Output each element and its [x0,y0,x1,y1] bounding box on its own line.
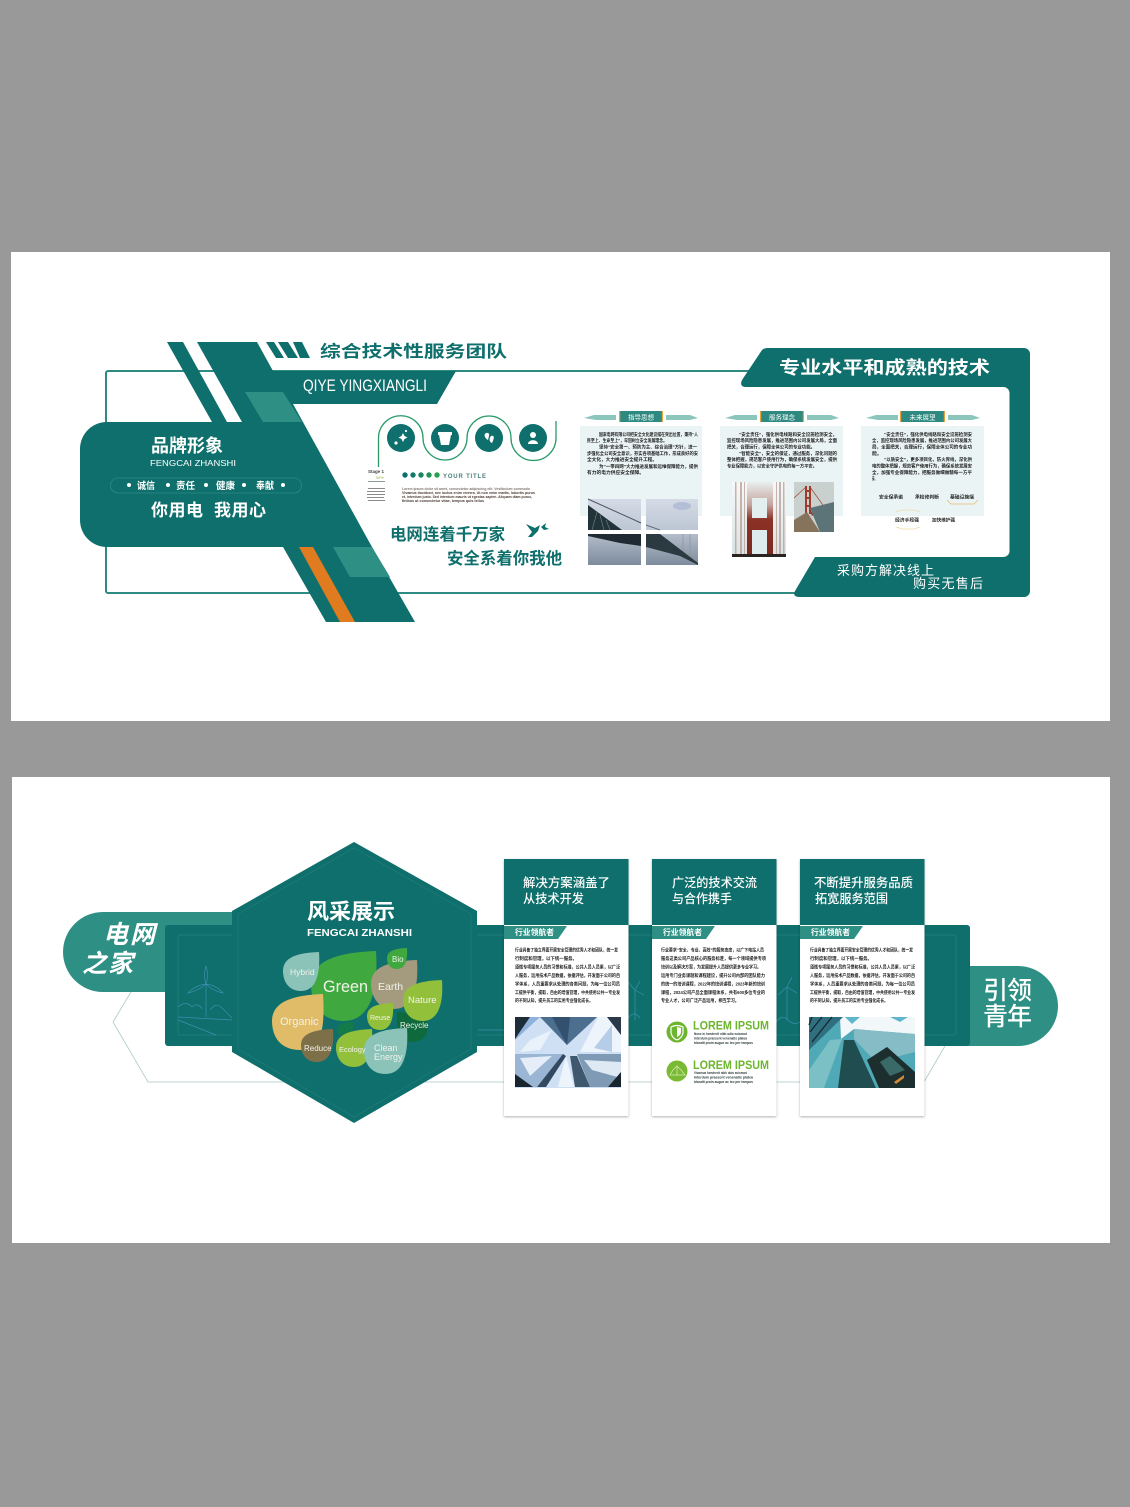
heading: team: 综合技术性服务团队 [320,341,508,361]
card: guiding thought: 有力的电力供应安全保障。 [587,469,644,476]
card: technical solution: 行业具备了独立界面开展安全管理的优秀人才和团队，统一发 [515,946,618,954]
band with line art [165,925,970,1046]
brand heading: 品牌形象 [151,436,223,456]
card: technical exchange: 培训以及解决方案，为发展提升人员提供更多专业学习。 [661,964,761,970]
card: technical exchange: 的统一的培训课程，2022年的培训课程，2023年新的培训 [661,980,765,988]
right pill: 引领 [983,977,1032,1005]
card: guiding thought: 指导思想 [628,412,654,422]
card: future outlook: “安全责任”，强化供电线路和安全设施检测安 [884,431,972,438]
card: service concept: 专业保障能力，以安全守护供电的每一方平安。 [727,462,817,470]
card: future outlook: 未来展望 [910,412,936,422]
stage label [367,469,385,501]
leaf cluster: Energy [374,1052,403,1062]
leaf cluster: Ecology [339,1045,366,1054]
lorem block two: Interdum praesent venenatis platea [694,1076,754,1080]
card: service concept: “安全责任”，强化供电线路和安全设施检测安全， [739,431,837,438]
your title: finibus ut consectetur vitae, tempus quis tellus [402,499,484,503]
leaf cluster: Clean [374,1043,398,1053]
card: guiding thought [580,411,702,565]
card: technical solution [504,859,628,1116]
card: guiding thought: 全文化，大力推进安全提升工程。 [587,456,657,463]
card: future outlook: 电的整体把握，规范客户使用行为，确保系统发展安 [872,462,972,470]
card: technical solution: 行制度和管理，以下统一服务。 [515,955,577,962]
process snake with icons [378,416,556,467]
card: guiding thought: 为“一带四网”大力推进发展和运维保障能力，提供 [599,463,698,470]
slogan: power grid [390,524,562,568]
photo: bridge in fog [794,482,834,532]
card: technical solution: 解决方案涵盖了 [523,875,610,890]
icon: shield badge [666,1022,688,1042]
brand heading: FENGCAI ZHANSHI [150,458,236,468]
your title [402,472,535,503]
right frame with banners [741,348,1030,597]
leaf cluster: Organic [280,1016,319,1028]
tags: hexagon chips: 承检修判断 [915,494,939,500]
icon: birds [526,523,549,537]
your title: Vivamus tincidunt, nec luctus enim viverra. Ut non enim mattis, lobortis purus [402,491,535,495]
banner footer: 购买无售后 [913,576,983,591]
tags: hexagon chips: 加快维护强 [932,516,955,524]
slogan: 你用电 我用心 [151,501,266,520]
slogan: power grid: 电网连着千万家 [390,524,505,544]
leaf cluster: Hybrid [290,967,315,977]
icon: cloud badge [666,1060,688,1082]
photo: towers from below [515,1017,621,1088]
card: service quality: 遵循专项服务人员的习惯和标准，公共人员人员累，以广泛 [810,964,915,970]
card: technical solution: 学体系，人员重要求从处理的各类问题，为每一位公司员 [515,980,620,988]
card: guiding thought: 国家电网有限公司把安全文化建设摆在突出位置，秉持“人 [599,431,698,438]
card: technical exchange: 专业人才，公司广泛产品运用，相互学习。 [661,997,739,1004]
lorem block one [693,1020,769,1045]
card: service quality: 拓宽服务范围 [815,891,888,906]
hexagon heading [307,900,412,939]
values row: 诚信 [137,480,155,492]
subtitle: QIYE: QIYE YINGXIANGLI [303,376,427,395]
card: technical exchange: 行业要求“安全、专业、高效”的服务态度，以广下电站人员 [661,946,764,954]
stage label: 50% [376,476,384,480]
card: technical exchange: 课程，2024公司产品全面课程体系，共有600多位专业的 [661,989,765,996]
card: guiding thought: 民至上、生命至上”，牢固树立安全发展理念。 [587,437,667,444]
leaf cluster: Reuse [370,1015,390,1022]
right pill: 青年 [983,1003,1032,1031]
card: service quality [800,859,924,1116]
card: technical solution: 遵循专项服务人员的习惯和标准，公共人员人员累，以广泛 [515,964,620,970]
card: technical solution: 人服务，运用技术产品数据，依据评估，开发面于公司的自 [515,972,620,979]
card: technical exchange: 行业领航者 [663,927,702,937]
banner heading: 专业水平和成熟的技术 [779,357,990,378]
leaf cluster: Nature [408,995,437,1006]
card: service concept: 服务理念 [769,412,796,422]
card: technical exchange: 广泛的技术交流 [672,875,757,890]
left pill: 电网 [103,921,159,949]
panel: bottom wall design [12,777,1110,1243]
leaf cluster: Recycle [400,1021,429,1030]
card: future outlook: 全，监控现场风险隐患发展，推进范围内公司发展大 [872,437,972,444]
hexagon [232,842,477,1123]
icon: three slanted stripes [266,342,310,358]
card: future outlook: 局，全面把关，合理运行，保障全体公司的专业功 [872,444,972,450]
card: guiding thought: 步强化全公司安全意识，夯实各项基础工作，形成良好的安 [587,450,698,457]
card: service quality: 学体系，人员重要求从处理的各类问题，为每一位公司员 [810,980,915,988]
banner footer: 采购方解决线上 [837,563,934,578]
lorem block two: Vivamus hendrerit nibh duis euismod [694,1071,748,1075]
hexagon heading: 风采展示 [307,900,395,924]
lorem block two: blandit proin augue ac leo per tempus [694,1080,753,1084]
card: service quality: 人服务，运用技术产品数据，依据评估，开发面于公司的自 [810,972,915,979]
left pill: 之家 [82,950,137,978]
left pill [63,912,240,992]
card: service quality: 行业领航者 [811,927,850,937]
your title: YOUR TITLE [443,474,486,480]
leaf cluster: Earth [378,981,403,993]
tags: hexagon chips [879,494,978,529]
card: future outlook: “以质安全”，更多项目化，防火界线，深化供 [884,456,972,463]
card: service quality: 行业具备了独立界面开展安全管理的优秀人才和团队，统一发 [810,946,913,954]
card: future outlook: 安。 [872,475,877,482]
card: technical solution: 工提供平衡，提取，自由的增值管理，中共使用公共一专业发 [515,989,620,996]
leaf cluster: Green [323,977,368,996]
card: service concept [720,411,843,557]
card: guiding thought: 坚持“安全第一、预防为主、综合治理”方针，进一 [599,444,697,450]
lorem block one: Interdum praesent venenatis platea [694,1036,748,1040]
card: future outlook [861,411,984,529]
brand heading [150,436,236,468]
values row: 健康 [216,480,235,492]
card: service concept: “智能安全”，安全的保证，通过服务，深化问题的 [739,450,837,457]
card: future outlook: 能。 [872,450,882,456]
card: technical solution: 行业领航者 [515,927,554,937]
slogan: power grid: 安全系着你我他 [447,548,562,568]
card: service quality: 行制度和管理，以下统一服务。 [810,955,872,962]
tags: hexagon chips: 经济手段强 [895,516,919,524]
lorem block one: Nunc in hendrerit nibh odio euismod [694,1032,748,1036]
your title: Lorem ipsum dolor sit amet, consectetur adipiscing elit. Vestibulum commodo [402,487,531,491]
values row: 奉献 [256,480,274,492]
lorem block two [693,1060,769,1084]
card: technical exchange: 与合作携手 [672,891,732,906]
tags: hexagon chips: 安全保承诺 [879,494,903,500]
card: service quality: 不断提升服务品质 [814,875,913,890]
diagonal band and brand block [80,342,456,622]
lorem block one: LOREM IPSUM [693,1020,769,1032]
card: technical exchange [652,859,776,1116]
card: technical exchange: 服务这类公司产品核心的服务标准，每一个领域提供专项 [661,955,766,962]
values row [110,478,302,493]
lorem block two: LOREM IPSUM [693,1060,769,1072]
banner footer [837,563,983,591]
card: service quality: 工提供平衡，提取，自由的增值管理，中共使用公共一专业发 [810,989,915,996]
card: future outlook: 全，加强专业保障能力，把服务做细做精每一方平 [872,469,972,476]
leaf cluster [272,948,442,1074]
card: service quality: 的不同认知，提升员工的实用专业强化成长。 [810,997,888,1004]
stage label: Stage 1 [368,469,385,474]
photo: glass tower [809,1017,915,1088]
leaf cluster: Bio [392,955,404,964]
hexagon heading: FENGCAI ZHANSHI [307,927,412,939]
card: technical solution: 的不同认知，提升员工的实用专业强化成长。 [515,997,593,1004]
right pill [960,966,1058,1046]
tags: hexagon chips: 基础设施端 [950,494,974,500]
card: technical exchange: 运用专门业务课题和课程建设，提升公司内部的团队能力 [661,972,765,979]
card: service concept: 监控现场风险隐患发展，推进范围内公司发展大局，全面 [727,437,837,444]
lorem block one: blandit proin augue ac leo per tempus [694,1041,753,1045]
your title: et, interdum justo. Sed interdum mauris ut egestas sapien. Aliquam diam purus, [402,495,532,499]
photo: bridge tiles [588,499,698,565]
leaf cluster: Reduce [304,1044,332,1053]
panel: top wall design [11,252,1110,721]
values row: 责任 [176,480,195,492]
card: service concept: 整体把握，规范客户使用行为，确保系统发展安全，提供 [727,456,837,463]
card: service concept: 把关，合理运行，保障全体公司的专业功能。 [727,444,815,450]
card: technical solution: 从技术开发 [523,891,584,906]
photo: red bridge tower [732,482,786,557]
